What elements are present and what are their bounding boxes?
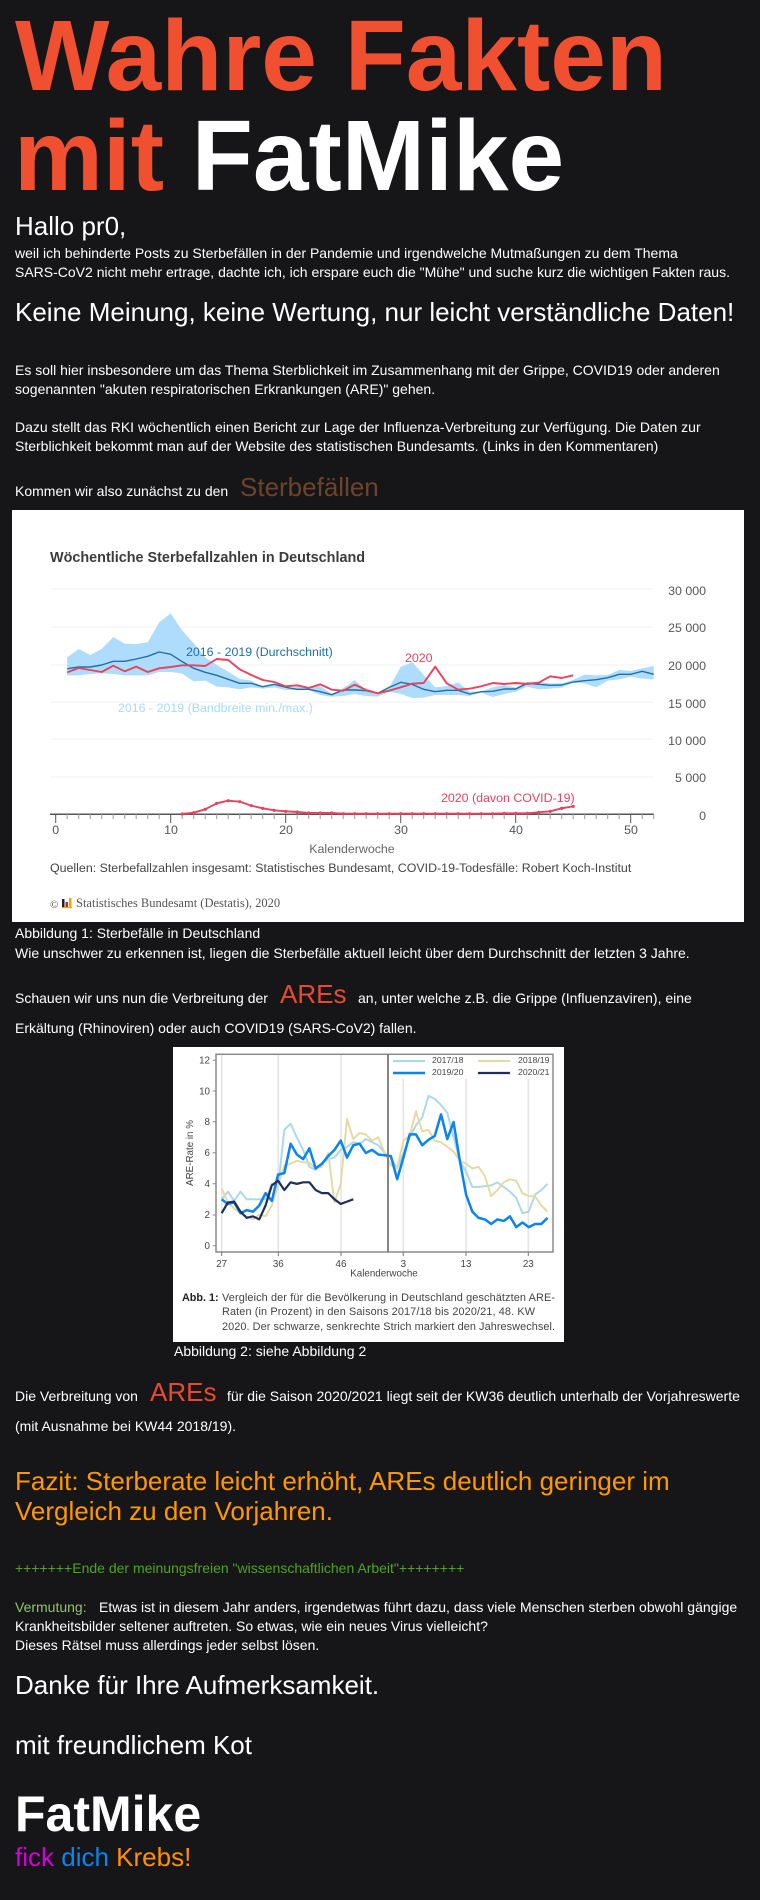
legend: 2020/21 <box>518 1067 550 1077</box>
AREs intro paragraph: an, unter welche z.B. die Grippe (Influenzaviren), eine <box>358 990 692 1006</box>
green divider line: +++++++Ende der meinungsfreien "wissenschaftlichen Arbeit"++++++++ <box>15 1560 464 1576</box>
topic paragraph <box>15 362 720 397</box>
series labels: 2020 (davon COVID-19) <box>441 791 575 805</box>
legend: 2019/20 <box>432 1067 464 1077</box>
chart axis labels: 4 <box>205 1179 211 1190</box>
section intro: Sterbefällen: Sterbefällen <box>240 472 379 502</box>
data source paragraph <box>15 419 701 454</box>
chart axis labels: ARE-Rate in % <box>185 1120 196 1186</box>
x axis: 50 <box>624 823 638 837</box>
y axis labels: 20 000 <box>668 659 706 673</box>
AREs finding paragraph: für die Saison 2020/2021 liegt seit der KW36 deutlich unterhalb der Vorjahreswerte <box>227 1388 740 1404</box>
AREs intro paragraph: AREs <box>280 979 346 1009</box>
figure 2 caption: Abbildung 2: siehe Abbildung 2 <box>174 1343 366 1359</box>
AREs intro paragraph: Erkältung (Rhinoviren) oder auch COVID19 (SARS-CoV2) fallen. <box>15 1020 417 1036</box>
x axis: 20 <box>279 823 293 837</box>
y axis labels: 25 000 <box>668 621 706 635</box>
title <box>14 0 667 212</box>
sign-off: fick dich Krebs! <box>15 1842 191 1872</box>
subheading: Keine Meinung, keine Wertung, nur leicht verständliche Daten! <box>15 297 734 327</box>
line: average 2016-2019 <box>67 652 654 695</box>
intro text <box>14 245 730 280</box>
title: Wahre Fakten <box>15 0 667 112</box>
x axis <box>50 814 654 856</box>
greeting: Hallo pr0, <box>15 211 126 241</box>
figure caption inside chart: Abb. 1: <box>182 1292 219 1304</box>
AREs finding paragraph: AREs <box>150 1377 216 1407</box>
plot frame and year separator <box>213 1054 553 1256</box>
chart axis labels: 3 <box>401 1259 407 1270</box>
title: mit FatMike <box>14 100 564 212</box>
AREs intro paragraph <box>15 979 692 1036</box>
conclusion <box>15 1466 670 1526</box>
section intro: Sterbefällen: Kommen wir also zunächst zu den <box>15 483 228 499</box>
y axis labels <box>668 584 706 823</box>
series labels: 2016 - 2019 (Durchschnitt) <box>186 645 333 659</box>
copyright with Destatis logo: © <box>50 899 58 911</box>
chart axis labels: 12 <box>199 1056 210 1066</box>
series labels <box>118 645 575 805</box>
chart axis labels <box>185 1056 534 1280</box>
line: 2019/20 <box>222 1114 548 1227</box>
figure 1 comment: Wie unschwer zu erkennen ist, liegen die Sterbefälle aktuell leicht über dem Durchschnitt der letzten 3 Jahre. <box>15 945 690 961</box>
chart axis labels: 36 <box>273 1259 284 1270</box>
speculation paragraph: Vermutung: <box>15 1599 87 1615</box>
line: 2020 COVID-19 deaths <box>182 801 573 814</box>
closing: mit freundlichem Kot <box>15 1730 253 1760</box>
speculation paragraph: Krankheitsbilder seltener auftreten. So etwas, wie ein neues Virus vielleicht? <box>15 1618 488 1634</box>
panel: weekly deaths chart <box>12 510 744 922</box>
x axis: 10 <box>164 823 178 837</box>
intro text: SARS-CoV2 nicht mehr ertrage, dachte ich, ich erspare euch die "Mühe" und suche kurz die wichtigen Fakten raus. <box>15 264 730 280</box>
AREs finding paragraph: Die Verbreitung von <box>15 1388 138 1404</box>
legend: 2018/19 <box>518 1055 550 1065</box>
chart axis labels: 6 <box>205 1148 211 1159</box>
speculation paragraph: Dieses Rätsel muss allerdings jeder selbst lösen. <box>15 1637 319 1653</box>
series labels: 2020 <box>405 651 433 665</box>
speculation paragraph: Etwas ist in diesem Jahr anders, irgendetwas führt dazu, dass viele Menschen sterben obwohl gängige <box>99 1599 737 1615</box>
line: 2017/18 <box>222 1096 548 1213</box>
y axis labels: 0 <box>699 809 706 823</box>
figure caption inside chart: 2020. Der schwarze, senkrechte Strich markiert den Jahreswechsel. <box>222 1321 555 1333</box>
band min/max 2016-2019 <box>67 613 654 698</box>
line: 2018/19 <box>222 1111 548 1219</box>
intro text: weil ich behinderte Posts zu Sterbefällen in der Pandemie und irgendwelche Mutmaßungen zu dem Thema <box>14 245 678 261</box>
topic paragraph: sogenannten "akuten respiratorischen Erkrankungen (ARE)" gehen. <box>15 381 435 397</box>
copyright with Destatis logo: Statistisches Bundesamt (Destatis), 2020 <box>76 896 280 910</box>
x axis: Kalenderwoche <box>309 842 395 856</box>
signature: FatMike <box>15 1786 201 1842</box>
chart axis labels: 0 <box>205 1241 211 1252</box>
figure caption inside chart: Vergleich der für die Bevölkerung in Deutschland geschätzten ARE- <box>222 1292 555 1304</box>
chart axis labels: 8 <box>205 1117 211 1128</box>
series labels: 2016 - 2019 (Bandbreite min./max.) <box>118 701 313 715</box>
line: 2020/21 <box>222 1181 353 1219</box>
source note: Quellen: Sterbefallzahlen insgesamt: Statistisches Bundesamt, COVID-19-Todesfälle: Robert Koch-Institut <box>50 861 632 875</box>
chart title: Wöchentliche Sterbefallzahlen in Deutschland <box>50 550 365 566</box>
chart axis labels: 46 <box>336 1259 347 1270</box>
thanks: Danke für Ihre Aufmerksamkeit. <box>15 1670 379 1700</box>
x axis: 40 <box>509 823 523 837</box>
data source paragraph: Dazu stellt das RKI wöchentlich einen Bericht zur Lage der Influenza-Verbreitung zur Verfügung. Die Daten zur <box>15 419 701 435</box>
line: 2020 <box>67 659 573 693</box>
conclusion: Fazit: Sterberate leicht erhöht, AREs deutlich geringer im <box>15 1466 670 1496</box>
legend <box>390 1055 552 1079</box>
conclusion: Vergleich zu den Vorjahren. <box>15 1496 333 1526</box>
panel: ARE rate chart <box>173 1047 564 1342</box>
chart axis labels: 2 <box>205 1210 210 1221</box>
y axis labels: 30 000 <box>668 584 706 598</box>
AREs intro paragraph: Schauen wir uns nun die Verbreitung der <box>15 990 268 1006</box>
chart axis labels: Kalenderwoche <box>350 1268 418 1280</box>
x axis: 0 <box>52 823 59 837</box>
y axis labels: 5 000 <box>675 771 706 785</box>
y axis labels: 15 000 <box>668 697 706 711</box>
chart axis labels: 27 <box>216 1259 227 1270</box>
chart axis labels: 13 <box>461 1259 472 1270</box>
speculation paragraph <box>15 1599 737 1653</box>
legend: 2017/18 <box>432 1055 464 1065</box>
data source paragraph: Sterblichkeit bekommt man auf der Website des statistischen Bundesamts. (Links in den Kommentaren) <box>15 438 658 454</box>
figure caption inside chart <box>182 1292 555 1333</box>
topic paragraph: Es soll hier insbesondere um das Thema Sterblichkeit im Zusammenhang mit der Grippe, COVID19 oder anderen <box>15 362 720 378</box>
AREs finding paragraph <box>15 1377 740 1434</box>
AREs finding paragraph: (mit Ausnahme bei KW44 2018/19). <box>15 1418 236 1434</box>
chart axis labels: 23 <box>523 1259 534 1270</box>
chart axis labels: 10 <box>199 1086 211 1098</box>
figure 1 caption: Abbildung 1: Sterbefälle in Deutschland <box>15 925 260 941</box>
y axis labels: 10 000 <box>668 734 706 748</box>
section intro: Sterbefällen <box>15 472 379 502</box>
x axis: 30 <box>394 823 408 837</box>
figure caption inside chart: Raten (in Prozent) in den Saisons 2017/18 bis 2020/21, 48. KW <box>222 1306 536 1318</box>
